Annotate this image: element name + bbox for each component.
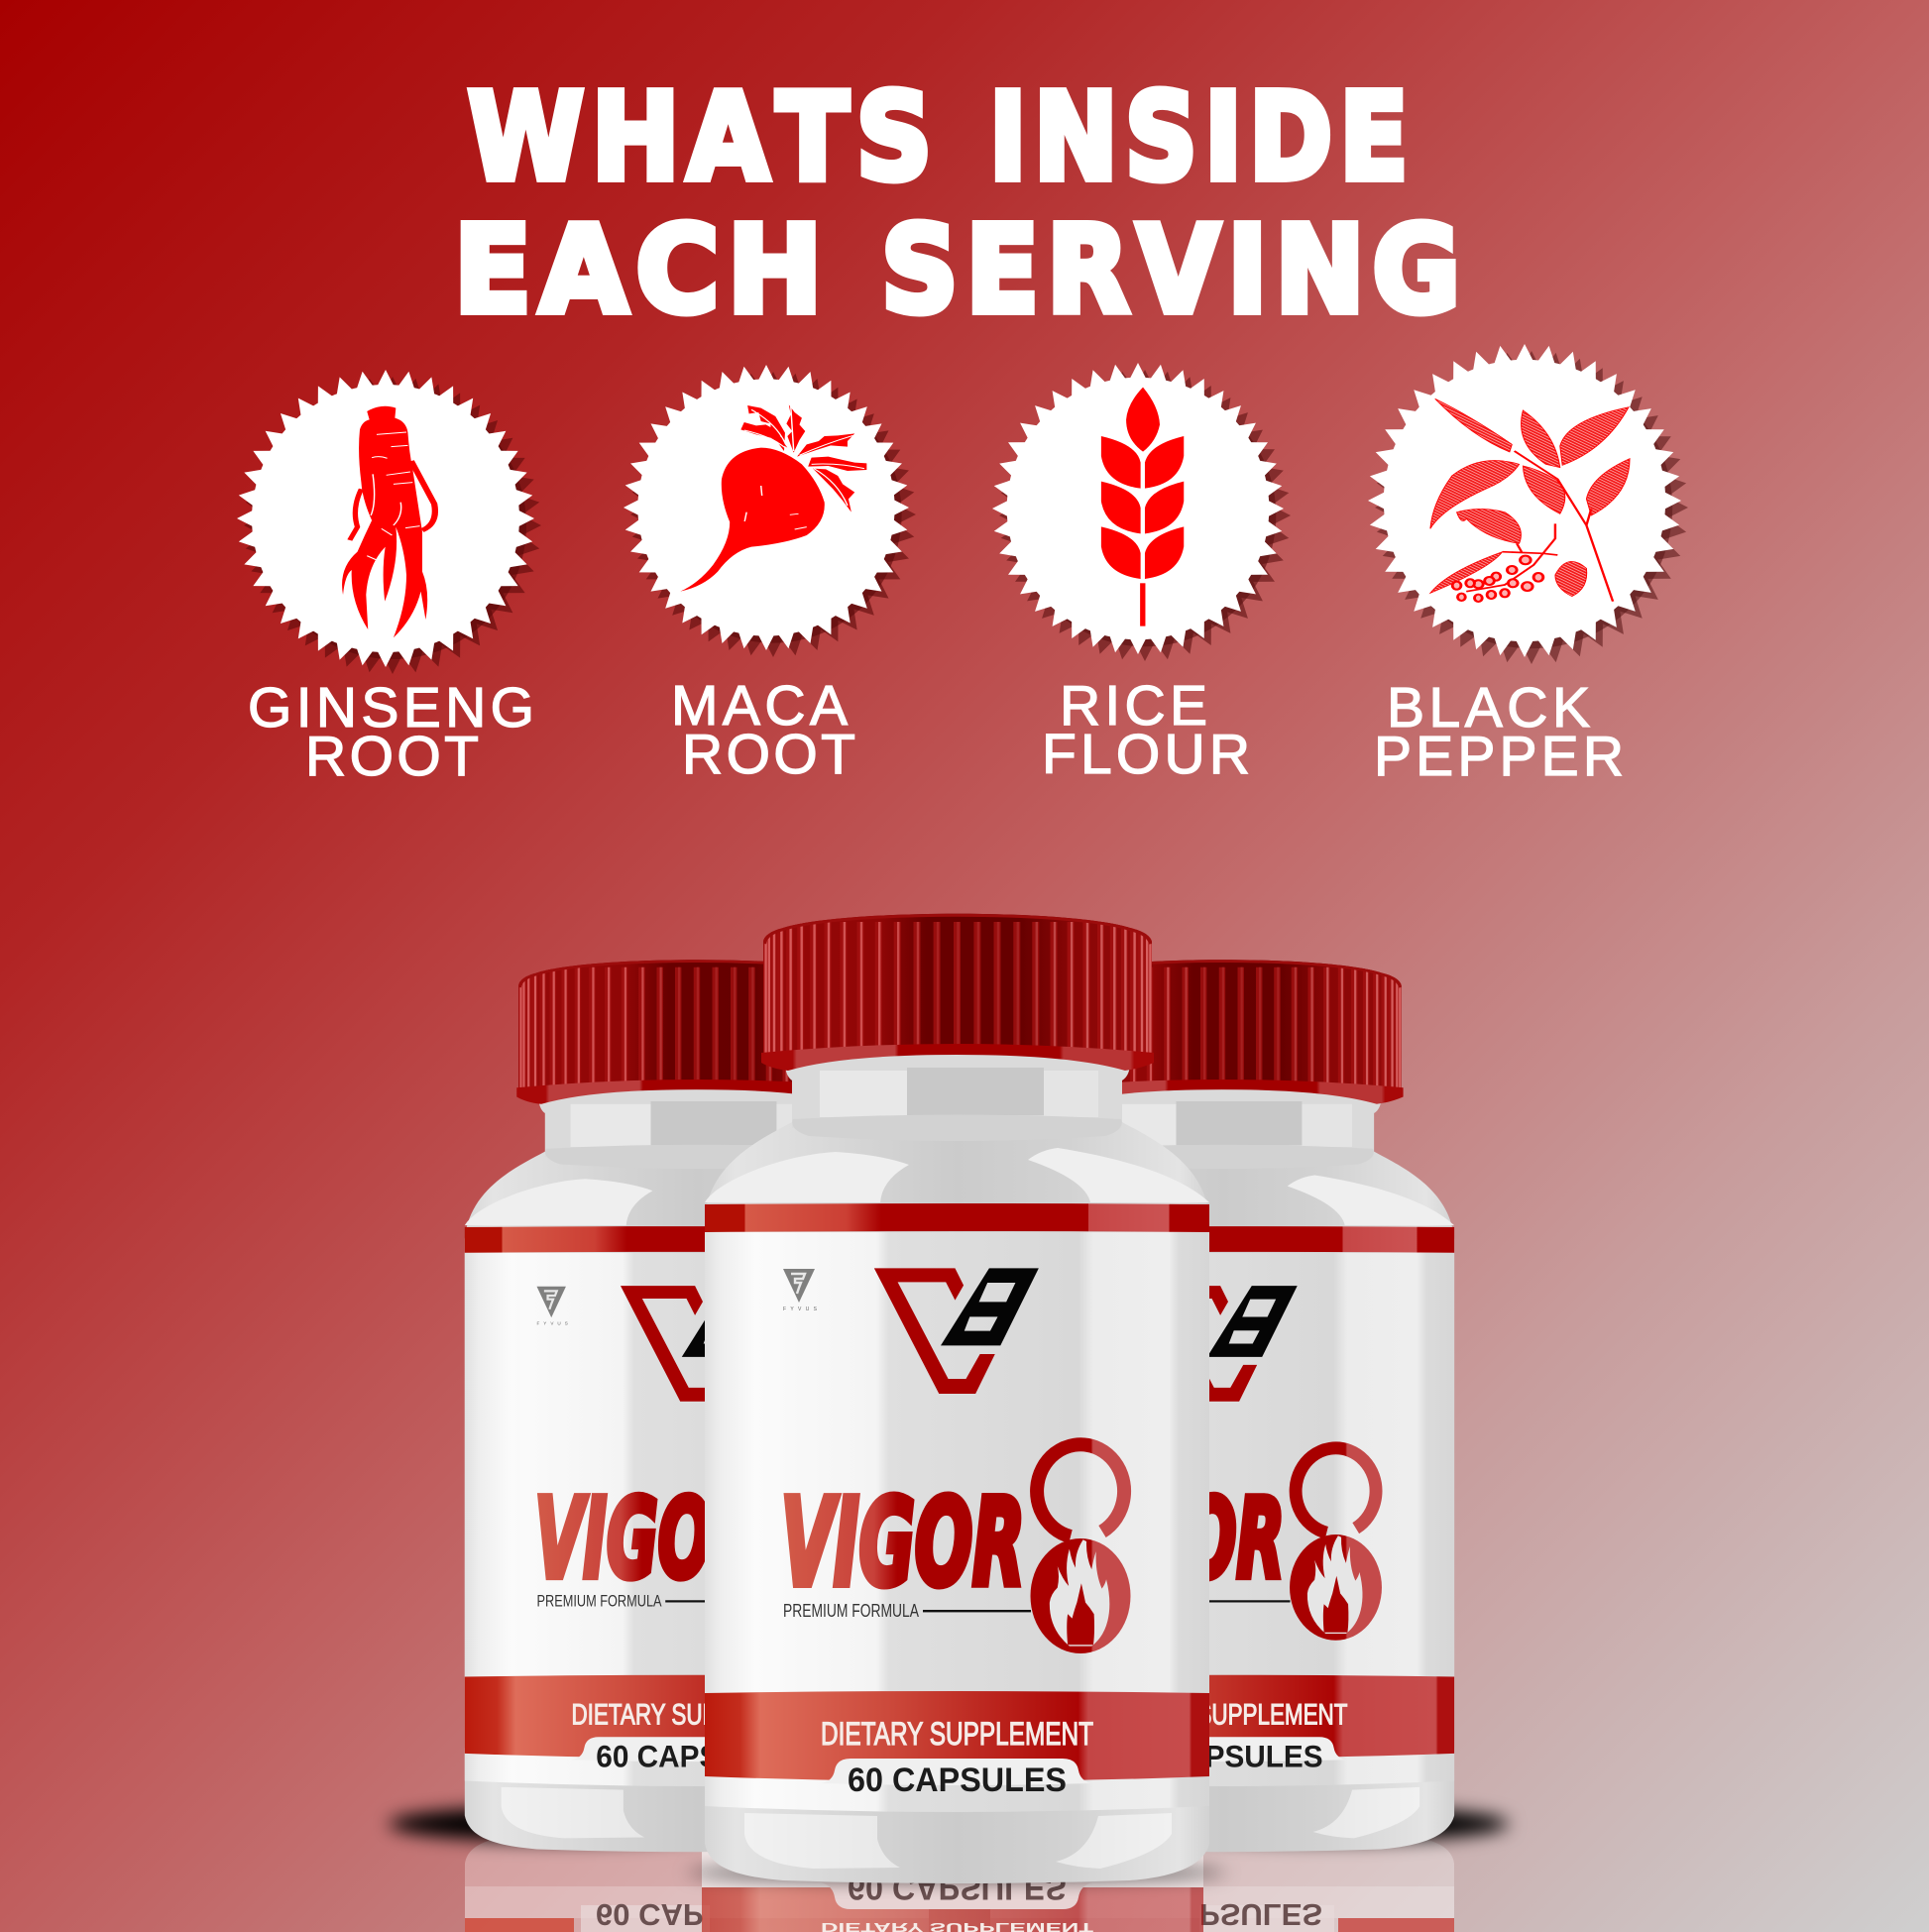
label: ginseng root <box>248 676 534 788</box>
icon: wheat <box>1101 388 1184 626</box>
reflection: left bottle: 60 CAP <box>596 1897 704 1932</box>
icon: ginseng root <box>342 406 435 637</box>
reflection: center bottle <box>702 1844 1203 1932</box>
tagline: PREMIUM FORMULA <box>783 1601 919 1621</box>
bottle: left <box>465 960 929 1852</box>
label text: 60 capsules: 60 CAPSULES <box>848 1762 1067 1799</box>
ingredient: rice flour badge <box>992 363 1291 786</box>
label: maca root: MACA <box>671 674 848 738</box>
label text: dietary supplement: DIETARY SUPPLEMENT <box>821 1716 1093 1752</box>
label: rice flour: RICE <box>1060 674 1207 738</box>
shoulder highlights <box>705 1148 1209 1202</box>
label: black pepper <box>1374 676 1624 788</box>
ingredient: black pepper badge <box>1368 344 1688 788</box>
label: ginseng root: GINSENG <box>248 676 534 739</box>
reflection: right bottle: PSULES <box>1199 1897 1322 1932</box>
floor shadow left <box>389 1806 741 1842</box>
label: ginseng root: ROOT <box>305 725 479 788</box>
bottle: center <box>705 914 1209 1883</box>
label: black pepper: PEPPER <box>1374 725 1624 788</box>
title: EACH <box>454 202 831 340</box>
ingredient: ginseng root badge <box>237 370 541 788</box>
reflection: left bottle <box>465 1836 929 1932</box>
bottom panel: left highlight <box>744 1813 900 1869</box>
neck <box>785 1055 1130 1141</box>
figure 8 with flame <box>1031 1444 1130 1653</box>
reflection: right bottle <box>990 1836 1454 1932</box>
top red band <box>705 1203 1209 1232</box>
ingredient: maca root badge <box>624 365 916 786</box>
label panel <box>705 1232 1209 1693</box>
bottle: right <box>990 960 1454 1852</box>
title: WHATS <box>468 69 940 207</box>
label: maca root: ROOT <box>682 723 855 786</box>
label: maca root <box>671 674 855 786</box>
product name: VIGOR <box>781 1475 1025 1613</box>
title: INSIDE <box>989 69 1416 207</box>
brand mark: fyvus <box>783 1269 818 1312</box>
title: SERVING <box>881 202 1468 340</box>
reflection: center bottle: 60 CAPSULES <box>848 1869 1067 1906</box>
brand mark: fyvus: FYVUS <box>783 1307 818 1312</box>
label: black pepper: BLACK <box>1387 676 1590 739</box>
tagline rule <box>923 1610 1031 1612</box>
bottom white strip <box>705 1770 1209 1812</box>
bottle cap <box>761 914 1154 1071</box>
logo: V8 monogram <box>874 1268 1039 1394</box>
bottom red band <box>705 1691 1209 1781</box>
floor shadow center <box>687 1865 1226 1880</box>
capsule tab <box>821 1759 1092 1785</box>
label: rice flour <box>1042 674 1250 786</box>
label: rice flour: FLOUR <box>1042 723 1250 786</box>
bottom panel: right highlight <box>1056 1813 1172 1869</box>
bottle body <box>705 1122 1209 1883</box>
icon: maca root <box>680 404 866 592</box>
floor shadow right <box>1148 1806 1509 1842</box>
title <box>454 69 1468 340</box>
icon: pepper plant <box>1430 398 1630 602</box>
